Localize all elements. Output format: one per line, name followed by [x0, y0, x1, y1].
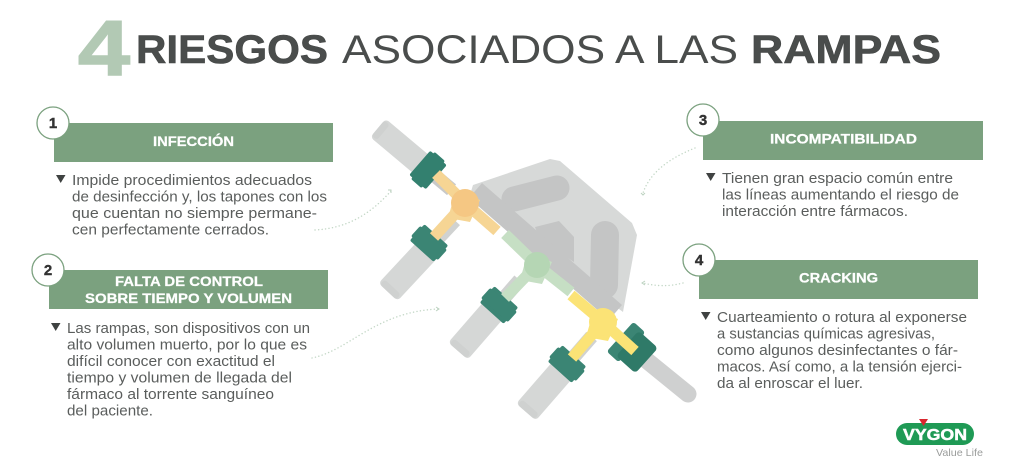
logo pill	[896, 423, 974, 445]
body text 4: macos. Así como, a la tensión ejerci-	[717, 360, 962, 376]
connector: orange	[434, 174, 497, 237]
heading 4: CRACKING	[799, 270, 878, 286]
body text 3: Tienen gran espacio común entre	[722, 171, 953, 187]
body text 2: del paciente.	[67, 404, 153, 420]
body text 1: cen perfectamente cerrados.	[72, 222, 269, 238]
number badge 3: 3	[699, 112, 707, 129]
body text 4: como algunos desinfectantes o fár-	[717, 343, 958, 359]
number badge 1	[37, 107, 69, 139]
heading 2: SOBRE TIEMPO Y VOLUMEN	[85, 291, 292, 306]
body text 3: las líneas aumentando el riesgo de	[722, 188, 959, 204]
connector: yellow	[571, 295, 635, 358]
body text 1: Impide procedimientos adecuados	[72, 173, 312, 189]
header bar 1	[54, 123, 333, 162]
body text 1: de desinfección y, los tapones con los	[72, 190, 327, 206]
tube: bottom	[516, 328, 601, 421]
body text 4: Cuarteamiento o rotura al exponerse	[717, 310, 967, 326]
panel: 2 falta de control	[32, 254, 328, 420]
title text: RIESGOS	[136, 28, 328, 72]
title text: RAMPAS	[751, 28, 941, 72]
title text: ASOCIADOS A LAS	[342, 28, 738, 72]
header bar 2	[49, 270, 328, 309]
body text 2: alto volumen muerto, por lo que es	[67, 338, 307, 354]
tagline: Value Life	[936, 447, 983, 459]
body text 1: que cuentan no siempre permane-	[72, 206, 317, 222]
number badge 2	[32, 254, 64, 286]
number badge 4: 4	[695, 252, 704, 269]
heading 1: INFECCIÓN	[153, 134, 234, 149]
body text 2: Las rampas, son dispositivos con un	[67, 321, 310, 337]
body text 2: difícil conocer con exactitud el	[67, 354, 275, 370]
number badge 2: 2	[44, 262, 52, 279]
panel: 4 cracking	[683, 244, 978, 392]
connector: green	[505, 234, 571, 298]
header bar 3	[703, 121, 983, 160]
body text 3: interacción entre fármacos.	[722, 204, 908, 220]
body text 2: tiempo y volumen de llegada del	[67, 370, 292, 386]
tube: top left	[370, 119, 459, 199]
panel: 1 infeccion	[37, 107, 333, 238]
bullet 3	[706, 173, 716, 181]
logo: vygon	[896, 419, 983, 459]
dotted arrows	[312, 148, 695, 358]
body text 4: a sustancias químicas agresivas,	[717, 326, 935, 342]
back plate	[469, 159, 637, 312]
tube: lower left	[378, 211, 464, 301]
header bar 4	[699, 260, 978, 299]
heading 2: FALTA DE CONTROL	[115, 274, 263, 289]
heading 3: INCOMPATIBILIDAD	[770, 132, 917, 146]
bullet 1	[56, 175, 66, 183]
tube: middle	[448, 272, 529, 360]
panel: 3 incompatibilidad	[687, 104, 983, 220]
luer caps	[408, 149, 658, 384]
tube: right	[640, 355, 688, 394]
body text 2: fármaco al torrente sanguíneo	[67, 387, 274, 403]
title number 4: 4	[78, 4, 130, 92]
title	[78, 4, 941, 92]
number badge 3	[687, 104, 719, 136]
plate inner shapes	[469, 183, 622, 320]
bullet 4	[701, 312, 710, 320]
number badge 1: 1	[49, 115, 57, 132]
body text 4: da al enroscar el luer.	[717, 376, 863, 392]
rampa device illustration	[370, 119, 688, 421]
logo name: VYGON	[903, 427, 967, 444]
bullet 2	[51, 323, 60, 331]
number badge 4	[683, 244, 715, 276]
logo mark	[919, 419, 928, 426]
